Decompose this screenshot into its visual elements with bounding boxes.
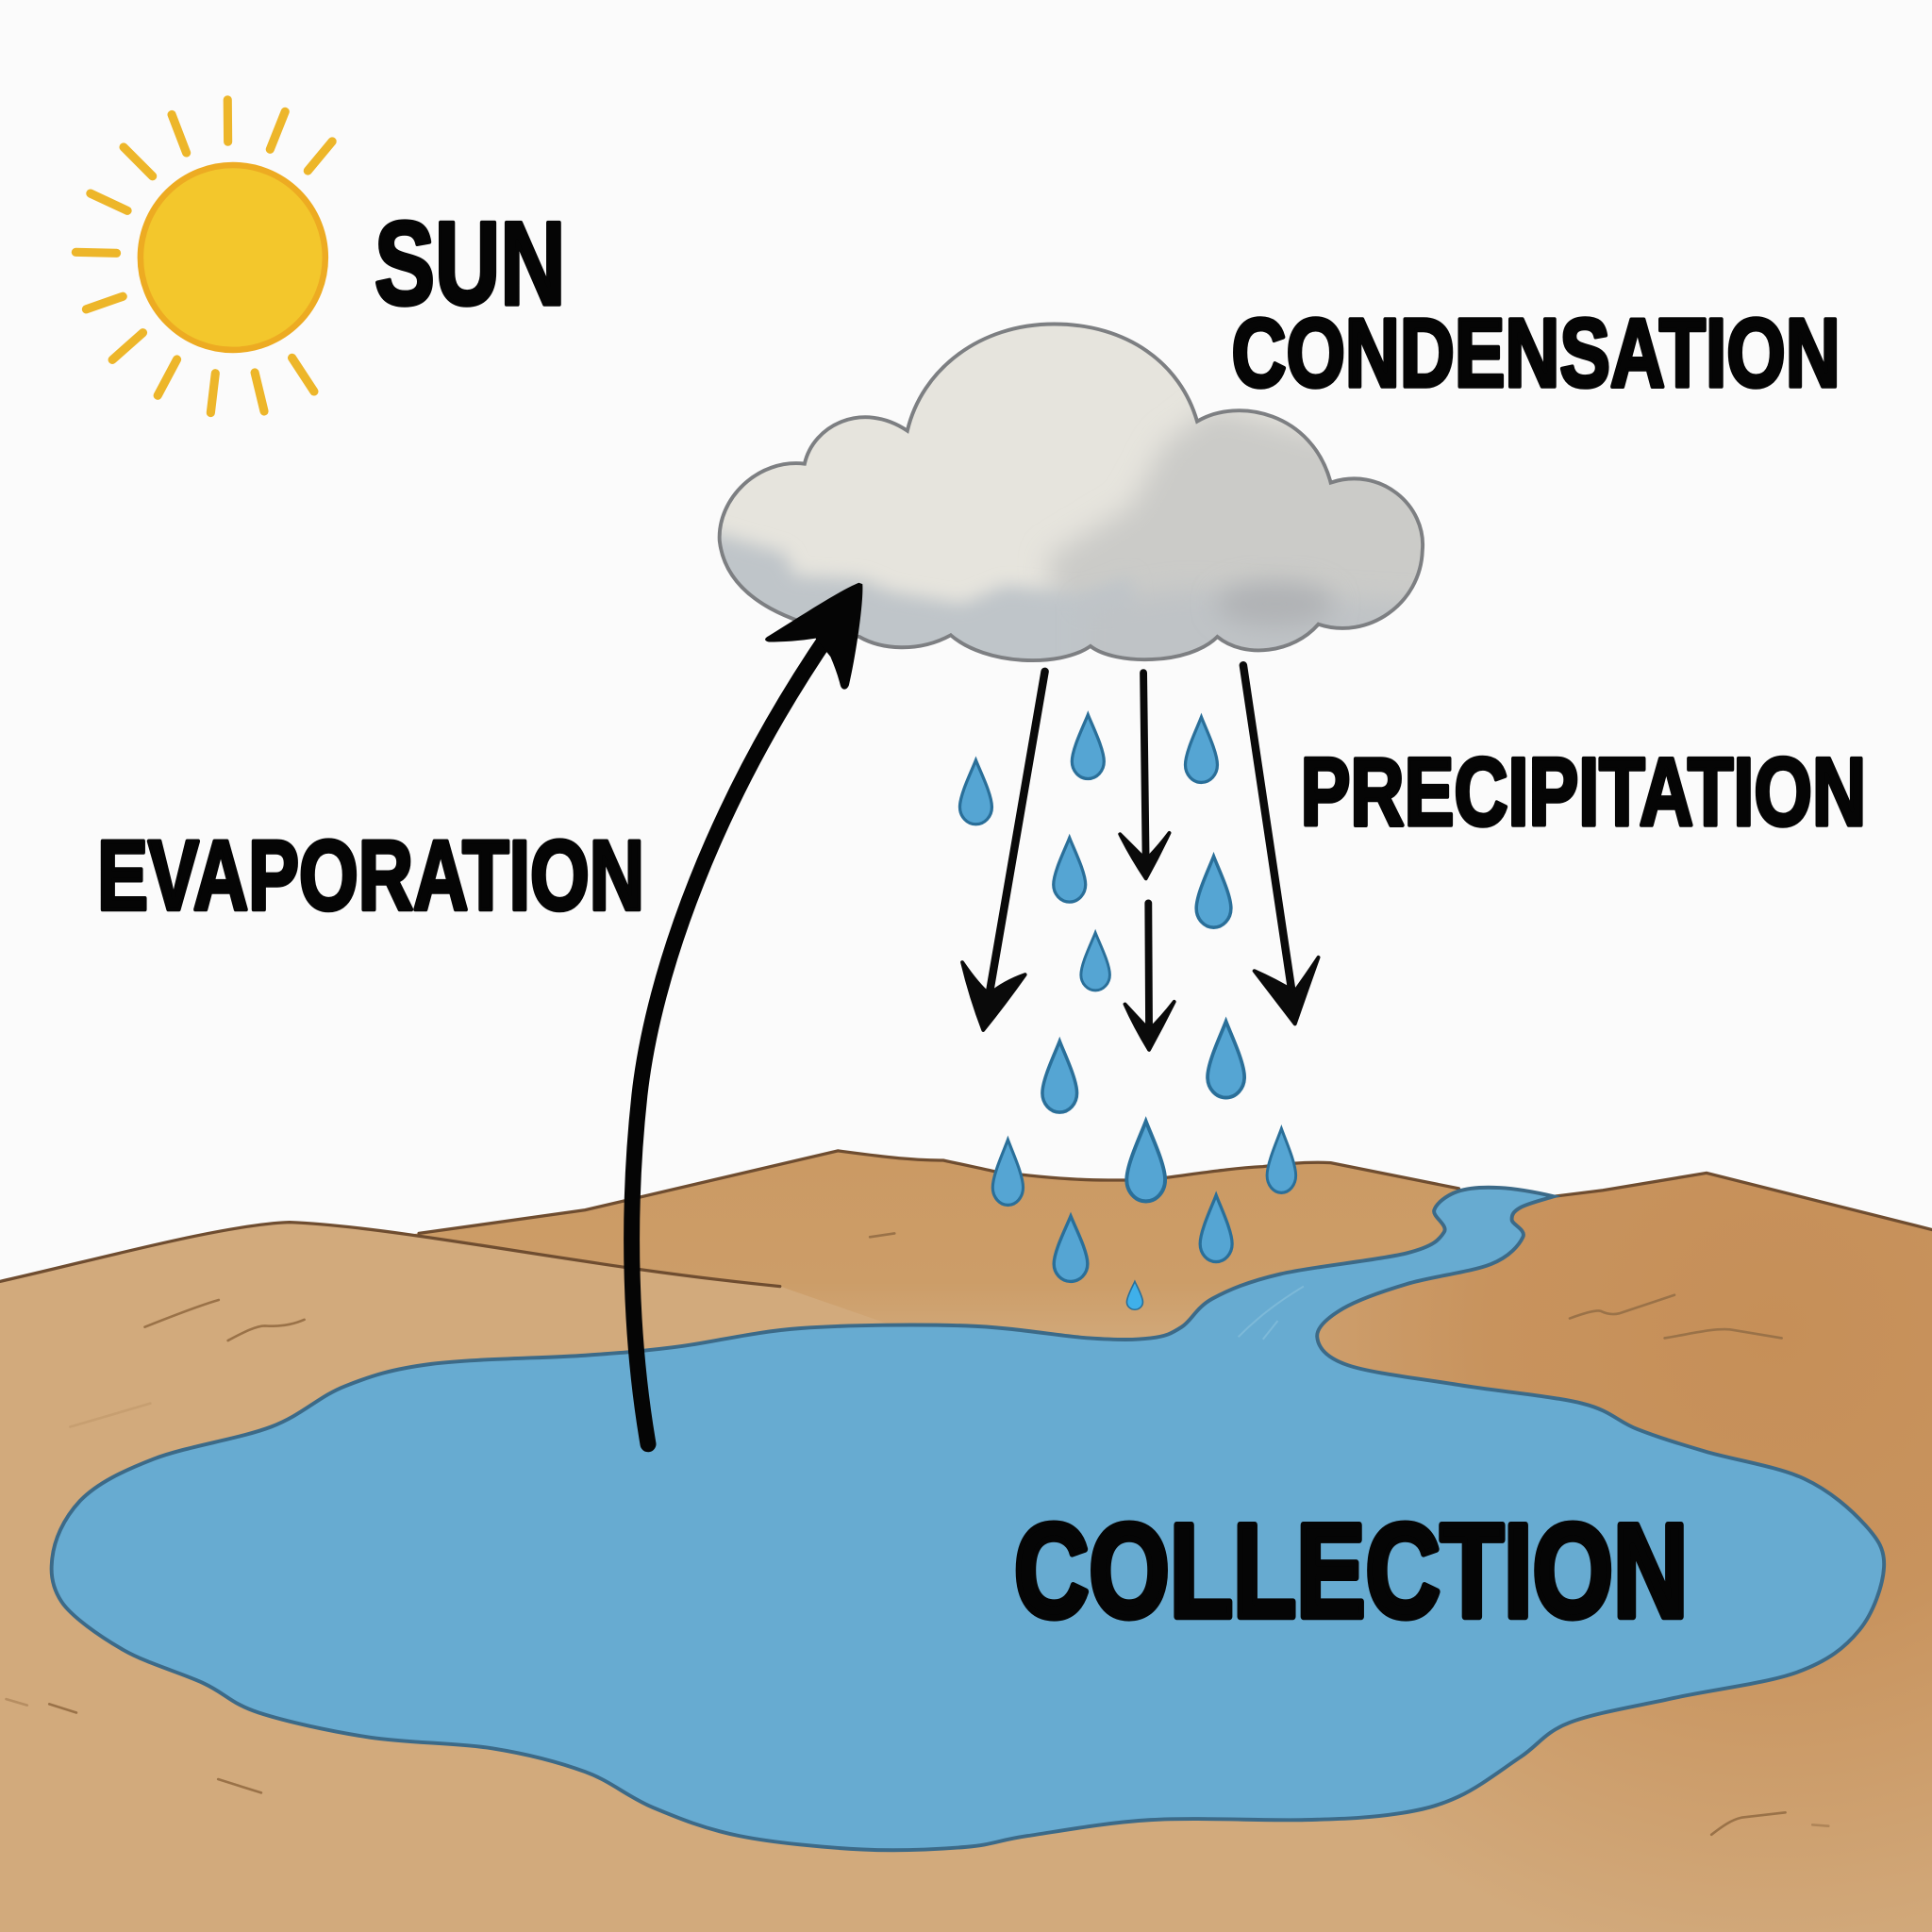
foreground land [0, 1173, 1932, 1932]
hill outlines [0, 1151, 1932, 1287]
arrow: right [1243, 665, 1319, 1024]
label: evaporation: EVAPORATION [97, 821, 644, 931]
river highlights [1239, 1287, 1304, 1340]
sun disc [141, 165, 325, 350]
land cracks [7, 1233, 1828, 1835]
sun [75, 100, 332, 413]
right land shading [1306, 1173, 1932, 1932]
arrow: centre lower [1124, 903, 1174, 1050]
cloud [717, 323, 1424, 662]
label: sun: SUN [375, 197, 566, 330]
arrow: left [962, 672, 1045, 1030]
precipitation arrows [962, 665, 1319, 1050]
arrow: centre upper [1120, 673, 1170, 878]
sun rays [75, 100, 332, 413]
evaporation arrow [632, 583, 862, 1444]
rain drops [959, 715, 1296, 1309]
label: collection: COLLECTION [1014, 1496, 1688, 1645]
collection lake and river [52, 1188, 1884, 1850]
back hill [409, 1151, 1466, 1349]
